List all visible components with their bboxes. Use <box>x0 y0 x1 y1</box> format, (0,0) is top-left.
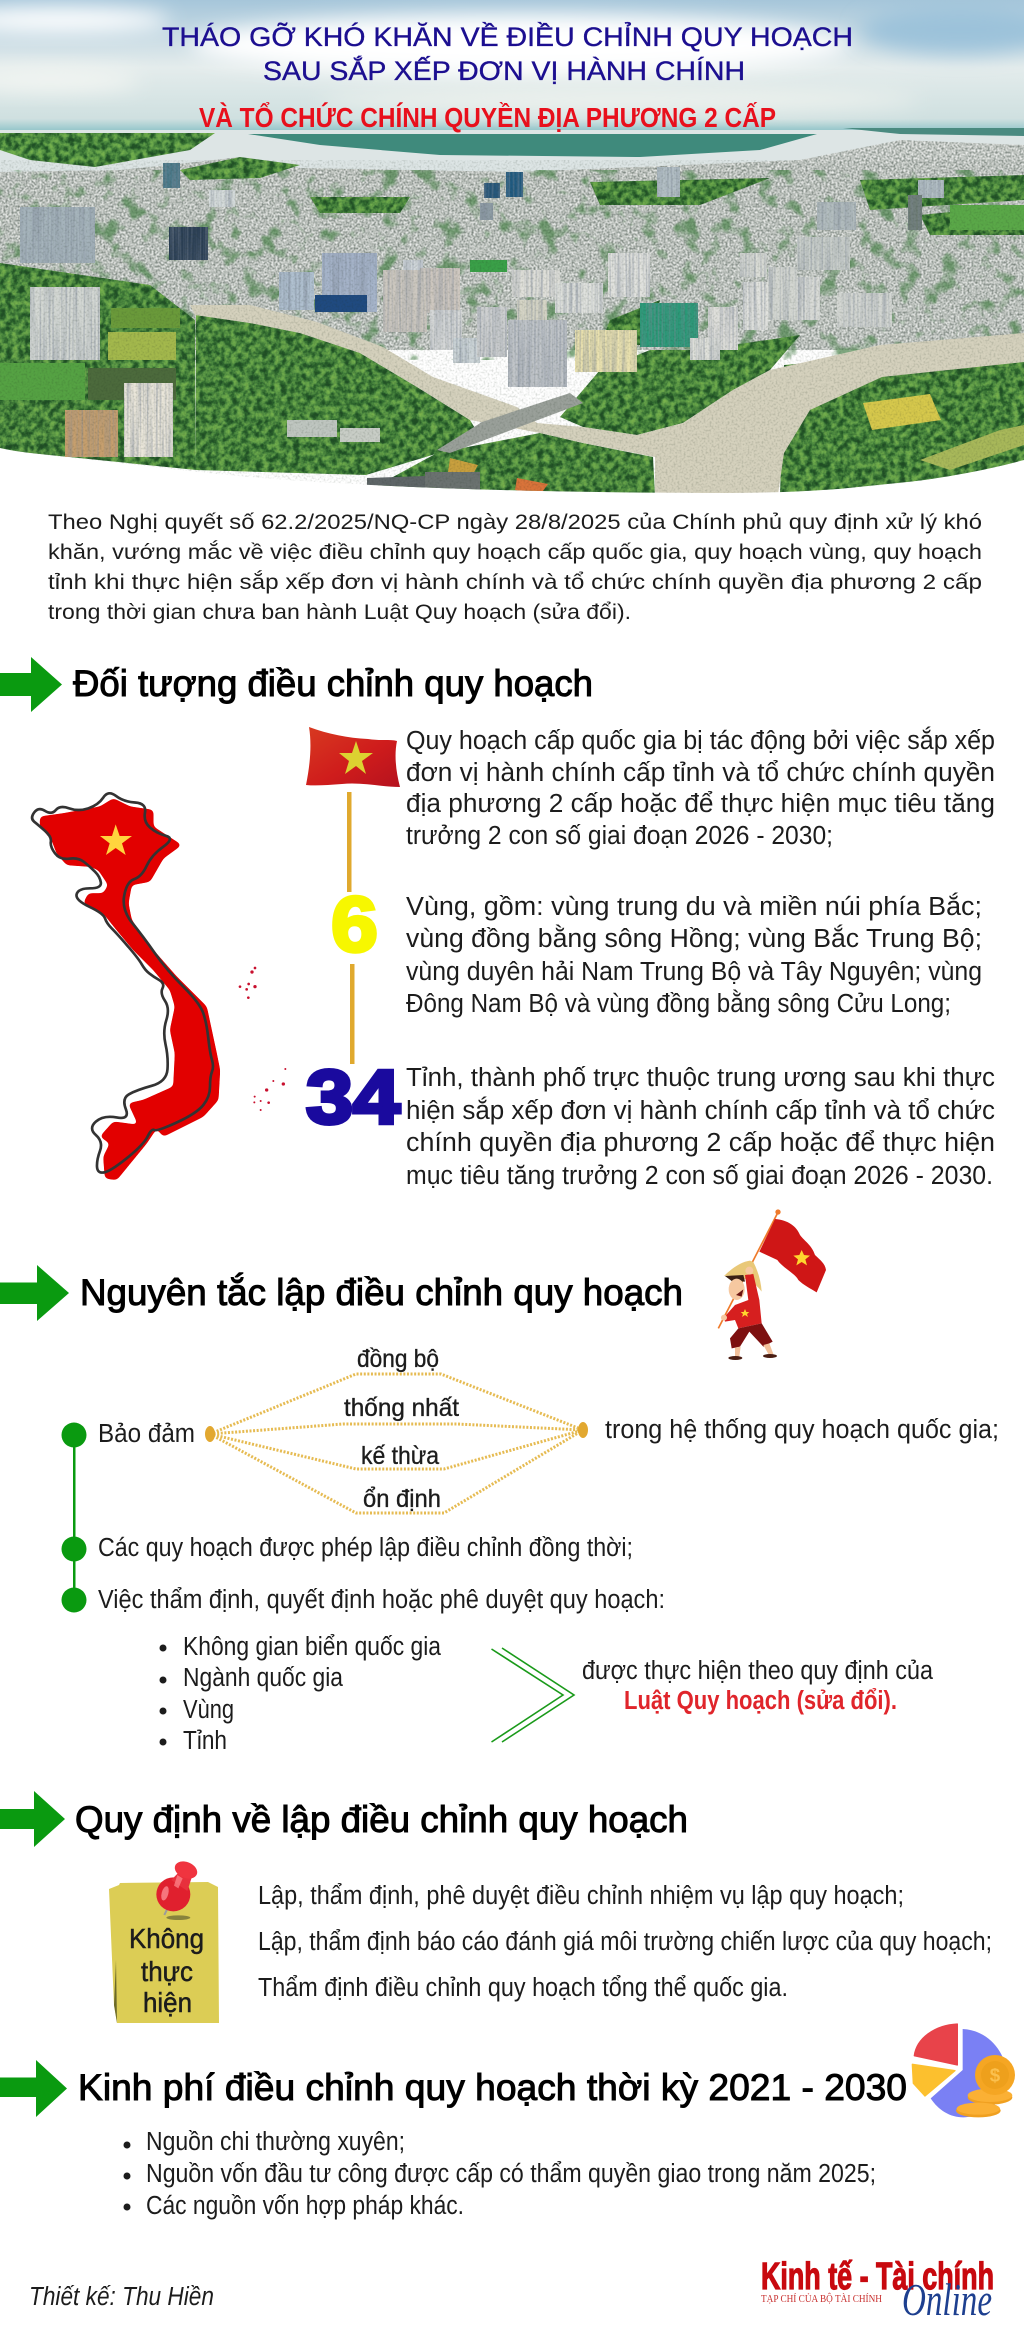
bullet list: funding sources: Các nguồn vốn hợp pháp khác. <box>146 2192 464 2220</box>
tower base <box>315 295 367 312</box>
connector line <box>350 964 354 1064</box>
section 2 heading <box>0 1265 683 1321</box>
text block: provinces: mục tiêu tăng trưởng 2 con số giai đoạn 2026 - 2030. <box>406 1162 993 1190</box>
bullet list: funding sources <box>124 2128 876 2220</box>
section 2 heading: Nguyên tắc lập điều chỉnh quy hoạch <box>80 1272 683 1313</box>
title <box>162 22 853 133</box>
label: Bảo đảm: Bảo đảm <box>98 1420 195 1448</box>
intro paragraph: Theo Nghị quyết số 62.2/2025/NQ-CP ngày 28/8/2025 của Chính phủ quy định xử lý khó <box>48 510 982 534</box>
text block: provinces: hiện sắp xếp đơn vị hành chính cấp tỉnh và tổ chức <box>406 1096 995 1125</box>
fields <box>0 205 1024 400</box>
bullet list: plan types: Không gian biển quốc gia <box>183 1633 442 1661</box>
text block: national: đơn vị hành chính cấp tỉnh và tổ chức chính quyền <box>406 759 995 787</box>
text block: provinces: chính quyền địa phương 2 cấp hoặc để thực hiện <box>406 1129 995 1157</box>
text block: national: địa phương 2 cấp hoặc để thực hiện mục tiêu tăng <box>406 790 995 818</box>
road bridge <box>437 393 583 453</box>
list: not performed items <box>258 1882 992 2002</box>
intro paragraph: khăn, vướng mắc về việc điều chỉnh quy hoạch cấp quốc gia, quy hoạch vùng, quy hoạch <box>48 539 982 564</box>
text block: regions: vùng duyên hải Nam Trung Bộ và Tây Nguyên; vùng <box>406 958 982 986</box>
text: concurrent adjustment: Các quy hoạch được phép lập điều chỉnh đồng thời; <box>98 1534 633 1562</box>
intro paragraph: trong thời gian chưa ban hành Luật Quy hoạch (sửa đổi). <box>48 600 631 624</box>
towers <box>20 163 944 457</box>
title: VÀ TỔ CHỨC CHÍNH QUYỀN ĐỊA PHƯƠNG 2 CẤP <box>199 102 776 133</box>
sticky note: not performed: thực <box>141 1956 193 1987</box>
text block: provinces <box>406 1064 995 1190</box>
sticky note: not performed <box>109 1858 219 2023</box>
diagram: dotted network of four principles: kế thừa <box>361 1442 439 1470</box>
yellow park and shore strip <box>863 394 941 430</box>
title: SAU SẮP XẾP ĐƠN VỊ HÀNH CHÍNH <box>263 56 745 86</box>
list: not performed items: Thẩm định điều chỉnh quy hoạch tổng thể quốc gia. <box>258 1974 788 2002</box>
number 6: 6 <box>331 880 378 968</box>
section 1 heading: Đối tượng điều chỉnh quy hoạch <box>73 663 593 704</box>
number 34: 34 <box>306 1055 400 1140</box>
river and far bank <box>0 130 1024 172</box>
text block: national: trưởng 2 con số giai đoạn 2026 - 2030; <box>406 822 833 850</box>
text block: regions: Vùng, gồm: vùng trung du và miền núi phía Bắc; <box>406 892 982 921</box>
text block: regions: vùng đồng bằng sông Hồng; vùng Bắc Trung Bộ; <box>406 924 982 953</box>
urban fabric <box>0 140 1024 350</box>
icon: pie chart with coins: $ <box>990 2065 1001 2086</box>
bullet list: funding sources: Nguồn chi thường xuyên; <box>146 2128 405 2156</box>
icon: pie chart with coins <box>912 2024 1015 2117</box>
section 3 heading <box>0 1791 688 1847</box>
icon: child with flag <box>718 1209 826 1360</box>
section 4 heading <box>0 2060 907 2117</box>
intro paragraph <box>48 510 982 624</box>
logo: Kinh tế - Tài chính Online <box>761 2256 994 2325</box>
bullet list: plan types: Vùng <box>183 1696 234 1724</box>
arrow: double chevron <box>492 1648 574 1742</box>
bullet list: funding sources: Nguồn vốn đầu tư công được cấp có thẩm quyền giao trong năm 2025; <box>146 2160 876 2188</box>
section 4 heading: Kinh phí điều chỉnh quy hoạch thời kỳ 2021 - 2030 <box>78 2067 907 2108</box>
river channels <box>190 305 1024 495</box>
callout: implemented per law: Luật Quy hoạch (sửa đổi). <box>624 1687 897 1715</box>
bullet list: plan types: Tỉnh <box>183 1727 227 1755</box>
diagram: dotted network of four principles: đồng bộ <box>357 1345 439 1373</box>
text: within national planning system: trong hệ thống quy hoạch quốc gia; <box>605 1416 999 1444</box>
text block: provinces: Tỉnh, thành phố trực thuộc trung ương sau khi thực <box>406 1064 995 1092</box>
text block: regions: Đông Nam Bộ và vùng đồng bằng sông Cửu Long; <box>406 989 951 1018</box>
section 3 heading: Quy định về lập điều chỉnh quy hoạch <box>75 1799 688 1840</box>
text block: national <box>406 726 995 850</box>
bullet list: plan types: Ngành quốc gia <box>183 1664 344 1692</box>
hero photo: aerial city view <box>0 0 1024 495</box>
icon: red push pin <box>156 1858 200 1920</box>
bullet list: plan types <box>160 1633 442 1755</box>
connector line <box>347 792 352 892</box>
sticky note: not performed: Không <box>129 1923 204 1954</box>
diagram: dotted network of four principles <box>205 1345 588 1513</box>
text: appraisal: Việc thẩm định, quyết định hoặc phê duyệt quy hoạch: <box>98 1586 665 1614</box>
callout: implemented per law <box>582 1657 934 1715</box>
sticky note: not performed: hiện <box>143 1987 192 2018</box>
icon: Vietnam map <box>32 793 286 1180</box>
credit: Thiết kế: Thu Hiền <box>29 2283 214 2311</box>
roofs and villas <box>287 420 548 495</box>
icon: waving flag <box>306 727 400 787</box>
diagram: dotted network of four principles: ổn định <box>363 1485 441 1513</box>
callout: implemented per law: được thực hiện theo quy định của <box>582 1657 934 1685</box>
green areas <box>0 133 1024 495</box>
photo grain <box>0 160 1024 495</box>
logo: Kinh tế - Tài chính Online: Online <box>902 2274 992 2325</box>
logo: Kinh tế - Tài chính Online: TẠP CHÍ CỦA BỘ TÀI CHÍNH <box>761 2293 882 2305</box>
section 1 heading <box>0 657 593 712</box>
diagram: dotted network of four principles: thống nhất <box>344 1394 459 1422</box>
text block: regions <box>406 892 982 1018</box>
title: THÁO GỠ KHÓ KHĂN VỀ ĐIỀU CHỈNH QUY HOẠCH <box>162 22 853 52</box>
list: not performed items: Lập, thẩm định, phê duyệt điều chỉnh nhiệm vụ lập quy hoạch; <box>258 1882 904 1910</box>
intro paragraph: tỉnh khi thực hiện sắp xếp đơn vị hành chính và tổ chức chính quyền địa phương 2 cấp <box>48 569 982 594</box>
timeline: green line with dots <box>62 1422 86 1612</box>
text block: national: Quy hoạch cấp quốc gia bị tác động bởi việc sắp xếp <box>406 726 995 755</box>
